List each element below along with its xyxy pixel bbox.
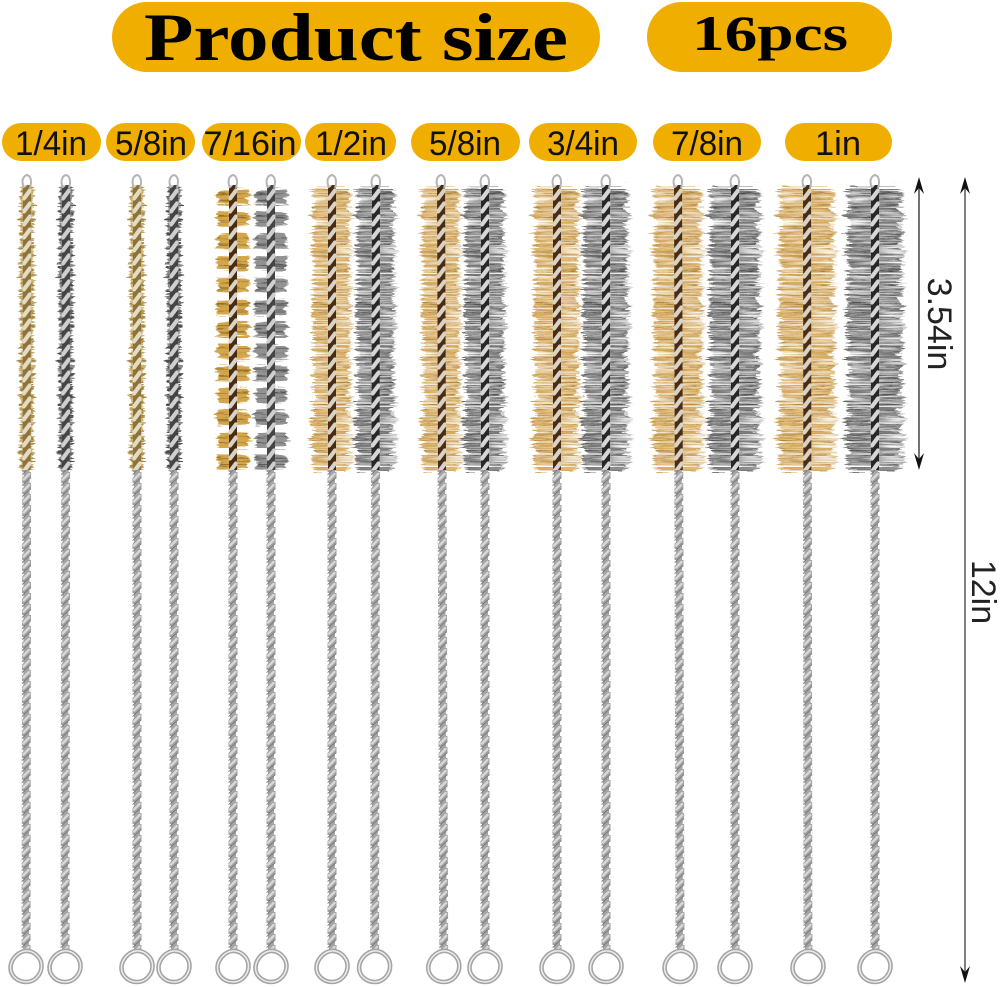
brush 1 steel xyxy=(49,175,82,982)
brush 8 brass xyxy=(776,175,839,982)
brush 5 steel xyxy=(463,175,507,982)
brush 8 steel xyxy=(844,175,906,982)
size label 1in: 1in xyxy=(815,125,861,163)
brush 4 steel xyxy=(354,175,397,982)
size label 5/8in: 5/8in xyxy=(115,125,187,163)
size label 3/4in xyxy=(529,123,637,163)
brush 2 steel xyxy=(158,175,190,982)
arrow: total length xyxy=(960,177,970,983)
size label 7/8in xyxy=(653,123,761,163)
size label 7/16in: 7/16in xyxy=(204,125,296,163)
brush 6 brass xyxy=(532,175,582,982)
size label 5/8in second xyxy=(411,123,520,163)
arrow: bristle length xyxy=(914,177,924,470)
brush 6 steel xyxy=(581,175,631,982)
title pill: Product size: Product size xyxy=(144,0,568,75)
size label 3/4in: 3/4in xyxy=(547,125,619,163)
brush 2 brass xyxy=(121,175,153,982)
brush 7 steel xyxy=(707,175,763,982)
quantity pill: 16pcs xyxy=(647,2,892,72)
size label 7/8in: 7/8in xyxy=(671,125,743,163)
brush 5 brass xyxy=(420,175,465,982)
size label 1/4in: 1/4in xyxy=(15,125,87,163)
quantity pill: 16pcs: 16pcs xyxy=(692,5,848,61)
size label 1/2in: 1/2in xyxy=(315,125,387,163)
brush 3 steel xyxy=(253,175,289,982)
size label 1in xyxy=(785,123,892,163)
brush 3 brass xyxy=(215,175,251,982)
size label 5/8in second: 5/8in xyxy=(429,125,501,163)
brush 1 brass xyxy=(10,175,43,982)
brush 4 brass xyxy=(311,175,353,982)
label: 3.54in: 3.54in xyxy=(920,278,958,370)
brush 7 brass xyxy=(651,175,707,982)
